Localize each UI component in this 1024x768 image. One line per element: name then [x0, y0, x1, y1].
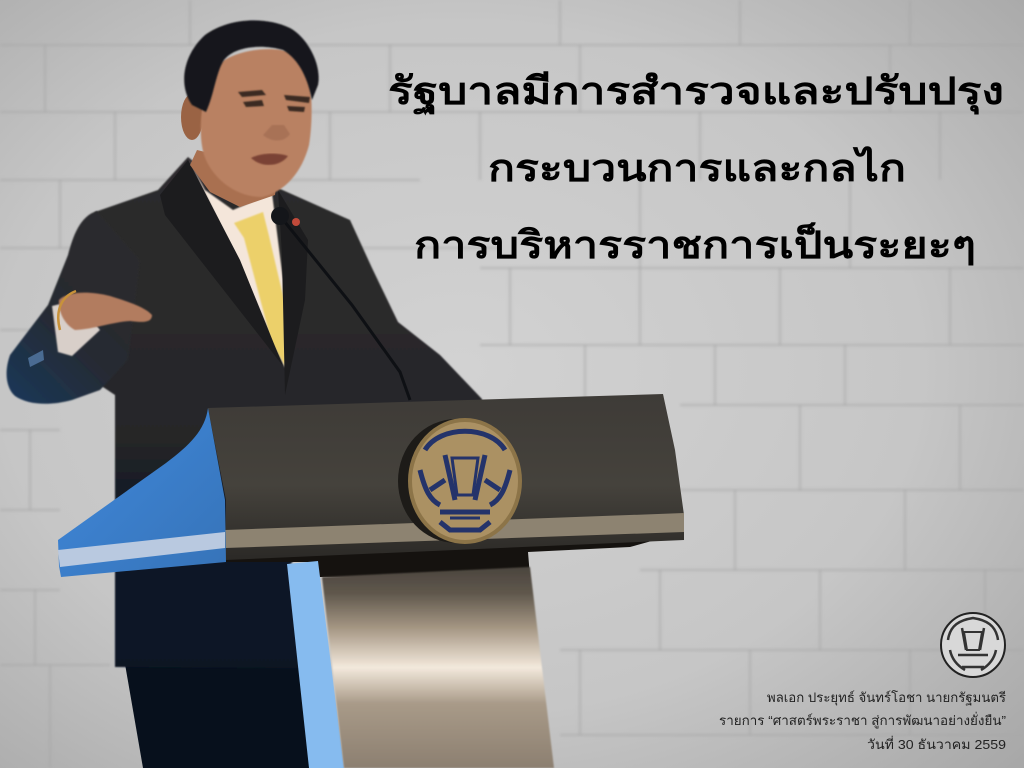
shirt and collar	[188, 158, 285, 368]
credit: programme: รายการ “ศาสตร์พระราชา สู่การพัฒนาอย่างยั่งยืน”	[719, 712, 1006, 729]
cuff	[52, 300, 100, 356]
title line 3: การบริหารราชการเป็นระยะๆ	[414, 222, 976, 267]
jacket sleeve	[7, 211, 140, 404]
tie	[234, 212, 285, 366]
credit: date: วันที่ 30 ธันวาคม 2559	[867, 736, 1006, 752]
face	[201, 49, 312, 197]
logo: government seal	[941, 613, 1005, 677]
podium metal front	[322, 567, 554, 768]
trousers	[125, 660, 312, 768]
podium shelf	[225, 532, 684, 577]
podium blue wing	[58, 408, 226, 577]
podium blue stem	[287, 561, 344, 768]
credit: speaker: พลเอก ประยุทธ์ จันทร์โอชา นายกรัฐมนตรี	[767, 690, 1006, 706]
microphone	[280, 216, 410, 400]
title line 1: รัฐบาลมีการสำรวจและปรับปรุง	[388, 71, 1004, 116]
neck	[190, 150, 278, 207]
eyes and brows	[238, 90, 310, 112]
photo: prime minister at podium	[7, 20, 684, 768]
bracelet	[58, 291, 76, 330]
podium top	[208, 394, 684, 560]
nose shadow	[263, 125, 290, 141]
jacket body	[85, 157, 482, 668]
podium blue wing strip	[58, 532, 225, 567]
pin	[292, 218, 300, 226]
podium silver strip	[225, 513, 684, 548]
credit text	[719, 690, 1006, 752]
title	[388, 71, 1004, 267]
ear	[181, 94, 203, 140]
podium seal	[398, 419, 520, 543]
hair	[184, 20, 319, 112]
lapels	[160, 160, 308, 395]
mouth	[251, 154, 288, 165]
sleeve buttons	[28, 350, 44, 367]
title line 2: กระบวนการและกลไก	[488, 146, 906, 190]
hand	[59, 293, 152, 330]
